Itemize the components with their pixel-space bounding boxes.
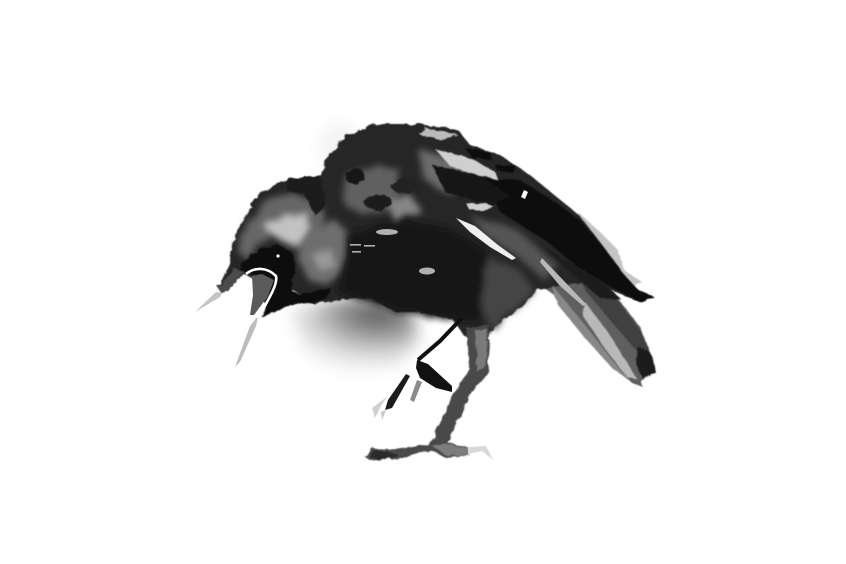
rear leg [365, 325, 490, 460]
lower beak [235, 274, 274, 367]
body: main mass [218, 124, 654, 337]
wing: dark primaries [465, 148, 654, 302]
front leg [372, 318, 462, 420]
head: grey cap [238, 192, 326, 258]
body: dark feather blots [285, 165, 510, 215]
wash: shadow under breast [290, 298, 418, 372]
upper beak tip [195, 292, 222, 312]
tail: grey feathers [515, 240, 656, 387]
rear foot: pale toe [468, 446, 493, 460]
body: small light flecks [350, 229, 435, 274]
neck and back: mid grey wash [298, 150, 478, 285]
bird [195, 124, 656, 460]
beak: white gape line [246, 269, 276, 318]
body: dark belly [338, 220, 535, 330]
wash: pale halo above back [318, 124, 362, 172]
wing: pale upper edge [578, 212, 642, 287]
head: eye mask [218, 244, 332, 318]
eye highlight [276, 254, 280, 258]
wing: pale streaks [420, 127, 498, 210]
wing: grey covert panel [470, 215, 560, 280]
wing: white line [456, 218, 516, 260]
